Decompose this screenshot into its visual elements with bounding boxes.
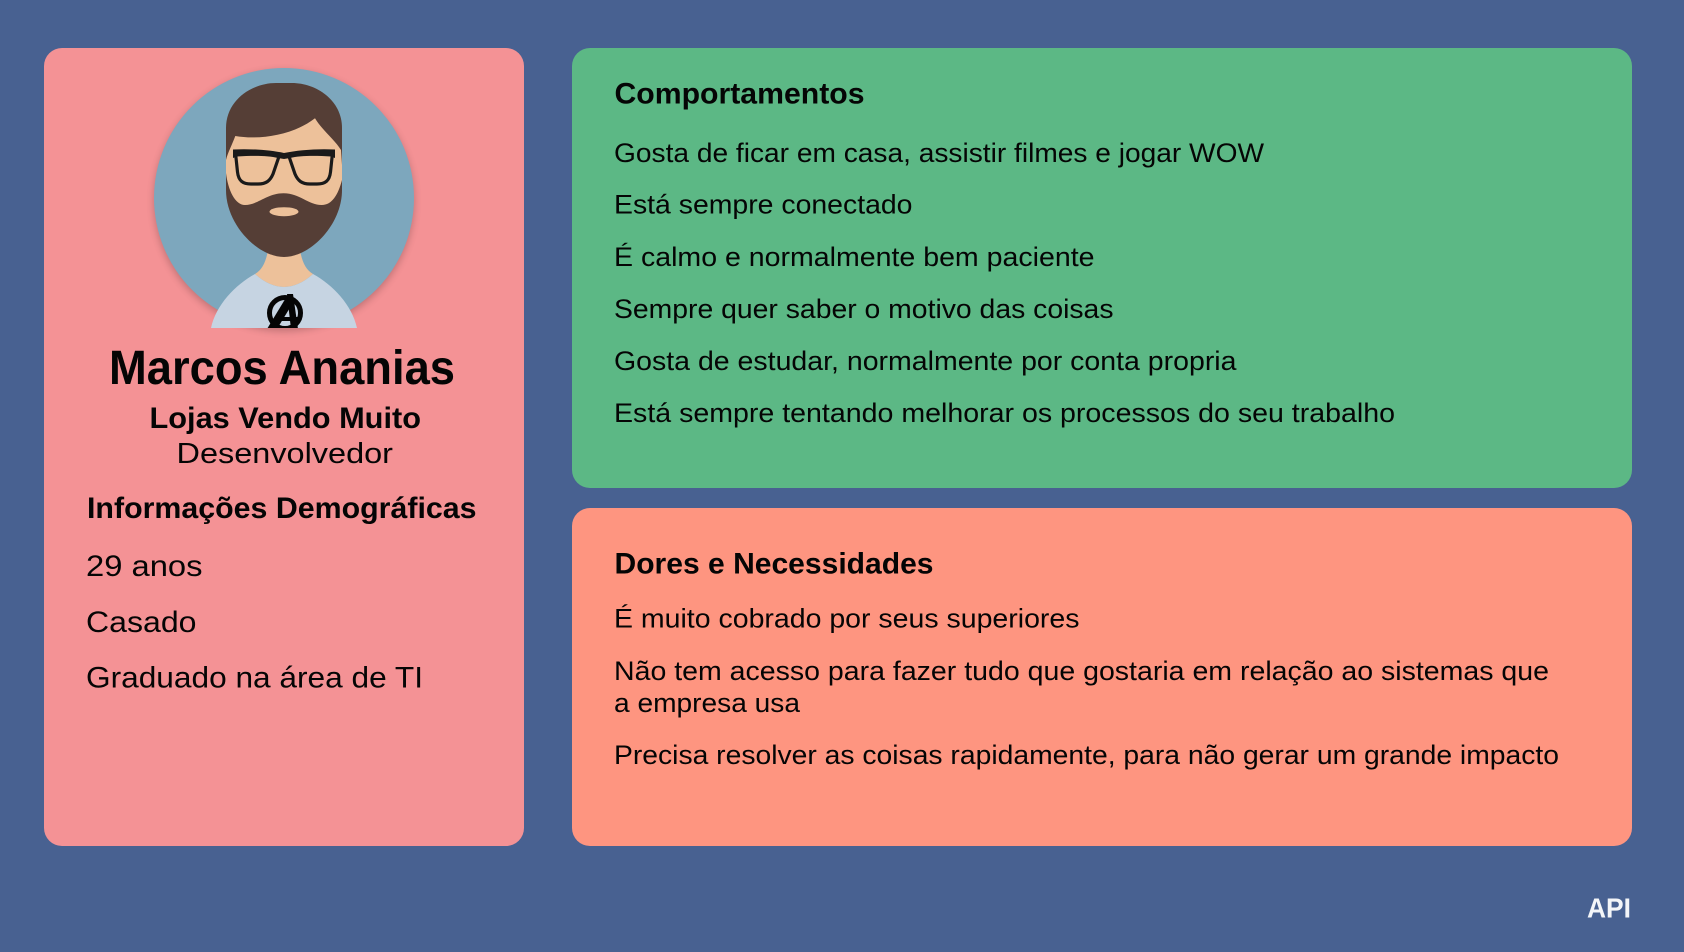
avatar background circle — [154, 68, 414, 328]
avatar illustration — [154, 68, 414, 331]
t-shirt — [211, 274, 357, 328]
comportamentos list: É calmo e normalmente bem paciente — [614, 242, 1094, 272]
comportamentos list: Gosta de estudar, normalmente por conta propria — [614, 346, 1238, 376]
comportamentos list: Está sempre conectado — [614, 190, 912, 220]
neck — [255, 250, 313, 287]
comportamentos list: Gosta de ficar em casa, assistir filmes e jogar WOW — [614, 138, 1265, 168]
dores heading: Dores e Necessidades — [614, 548, 934, 580]
hair and beard — [226, 83, 342, 257]
dores list: a empresa usa — [614, 688, 801, 718]
icon: avengers logo — [267, 294, 300, 329]
dores list — [614, 604, 1559, 770]
comportamentos list: Sempre quer saber o motivo das coisas — [614, 294, 1114, 324]
mouth — [270, 207, 298, 216]
company: Lojas Vendo Muito — [150, 402, 421, 435]
role: Desenvolvedor — [176, 438, 393, 470]
avatar shadow — [154, 71, 414, 331]
demographics list: Casado — [86, 606, 196, 639]
name: Marcos Ananias — [109, 342, 455, 395]
comportamentos list: Está sempre tentando melhorar os processos do seu trabalho — [614, 398, 1395, 428]
face — [226, 118, 342, 205]
glasses — [233, 149, 335, 184]
dores list: É muito cobrado por seus superiores — [614, 604, 1080, 634]
demographics heading: Informações Demográficas — [87, 492, 476, 525]
dores list: Precisa resolver as coisas rapidamente, para não gerar um grande impacto — [614, 740, 1559, 770]
API label: API — [1587, 892, 1631, 924]
dores list: Não tem acesso para fazer tudo que gostaria em relação ao sistemas que — [614, 656, 1549, 686]
panel: persona profile — [44, 48, 524, 846]
demographics list: 29 anos — [86, 550, 202, 583]
panel: dores e necessidades — [572, 508, 1632, 846]
comportamentos heading: Comportamentos — [614, 78, 864, 110]
comportamentos list — [614, 138, 1395, 428]
demographics list: Graduado na área de TI — [86, 662, 423, 694]
demographics list — [86, 550, 423, 694]
panel: comportamentos — [572, 48, 1632, 488]
